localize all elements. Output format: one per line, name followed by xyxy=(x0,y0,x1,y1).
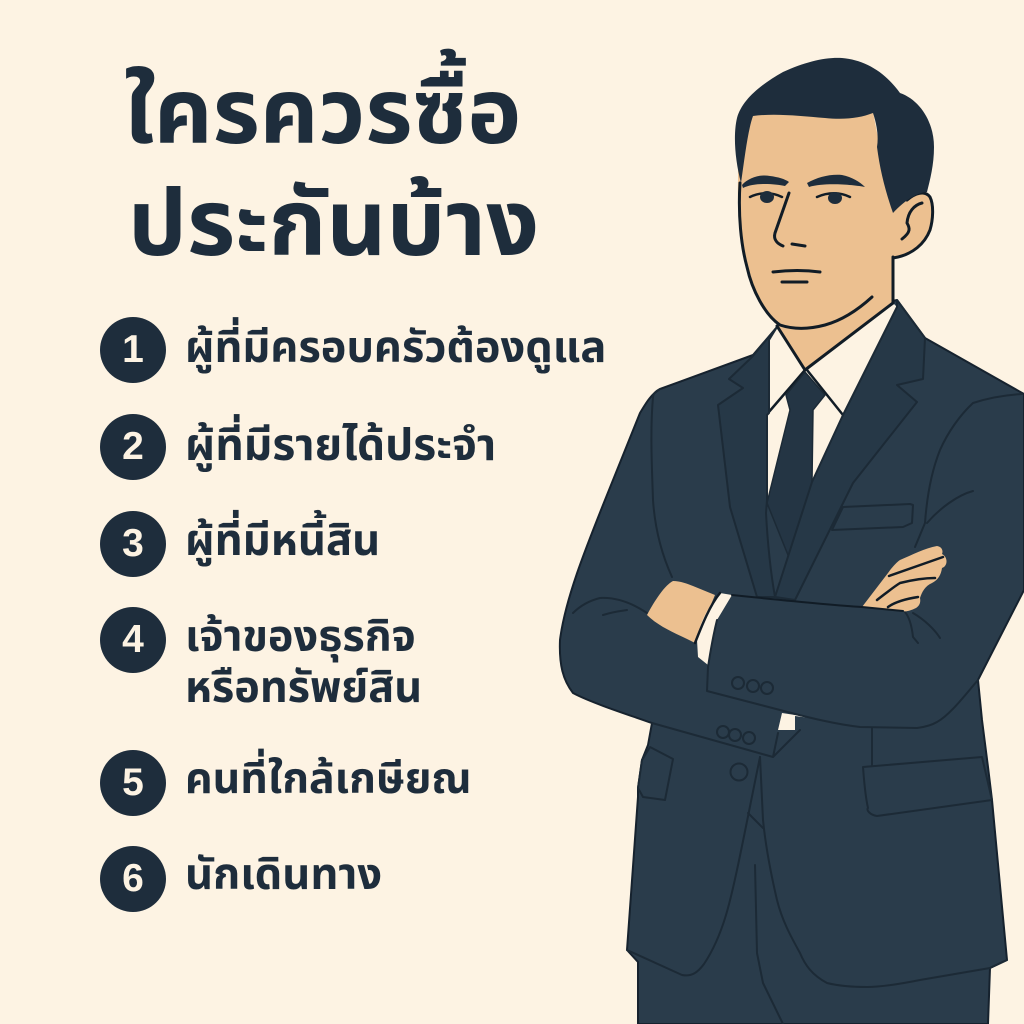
list item 2: ผู้ที่มีรายได้ประจำ xyxy=(185,421,496,470)
shirt collar xyxy=(767,303,897,500)
hair xyxy=(735,58,934,213)
list item 6: นักเดินทาง xyxy=(185,851,382,899)
sleeve buttons and jacket button xyxy=(717,677,773,780)
list item 5: คนที่ใกล้เกษียณ xyxy=(185,755,472,803)
list item 3 xyxy=(100,510,380,577)
list item 3: 3 xyxy=(122,522,144,565)
list item 4: หรือทรัพย์สิน xyxy=(185,664,422,712)
title xyxy=(124,48,539,275)
lower pockets xyxy=(638,747,992,816)
necktie xyxy=(767,372,825,560)
list item 2: 2 xyxy=(122,425,144,468)
neck xyxy=(770,250,893,371)
list item 4: เจ้าของธุรกิจ xyxy=(185,613,416,661)
ear xyxy=(890,193,933,258)
list item 4: 4 xyxy=(122,618,144,661)
list item 1: 1 xyxy=(122,328,144,371)
title: ประกันบ้าง xyxy=(128,171,539,275)
list item 2 xyxy=(100,414,496,480)
eyebrows and eyes xyxy=(742,175,865,204)
crossed arms outlines xyxy=(652,595,978,765)
jacket lapels xyxy=(718,300,925,600)
list item 6: 6 xyxy=(122,857,144,900)
list item 4 xyxy=(100,607,422,712)
title: ใครควรซื้อ xyxy=(124,62,521,163)
suit jacket and trousers xyxy=(560,300,1024,1024)
list item 5: 5 xyxy=(122,761,144,804)
list item 5 xyxy=(100,748,472,816)
breast pocket xyxy=(832,504,913,530)
face xyxy=(738,112,893,327)
hand and shirt cuff on left xyxy=(647,581,810,730)
list item 1: ผู้ที่มีครอบครัวต้องดูแล xyxy=(185,324,606,372)
face outline and features xyxy=(739,183,922,370)
list item 3: ผู้ที่มีหนี้สิน xyxy=(185,517,380,565)
list item 1 xyxy=(100,317,606,383)
list item 6 xyxy=(100,846,382,912)
hand on right xyxy=(862,546,946,611)
sleeve and jacket seams xyxy=(573,389,1022,643)
